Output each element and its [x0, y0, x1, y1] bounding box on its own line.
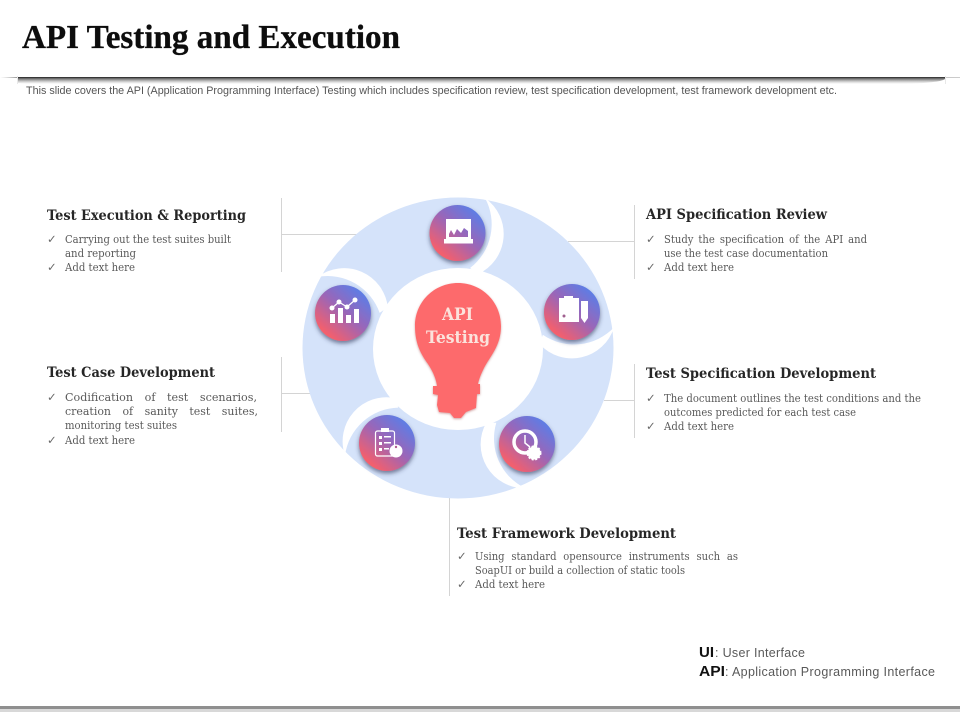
text block: Test Framework Development: Using standard opensource instruments such as	[475, 550, 738, 563]
text block: Test Case Development	[47, 365, 258, 447]
light bulb with label	[415, 283, 501, 418]
text block: Test Execution & Reporting: Add text here	[64, 261, 135, 274]
text block: Test Case Development: ✓	[47, 433, 57, 447]
icon: clock and gear	[499, 416, 555, 472]
text block: Test Execution & Reporting: Test Execution & Reporting	[47, 208, 247, 224]
text block: Test Case Development: creation of sanity test suites,	[65, 405, 258, 418]
text block: Test Case Development: Add text here	[64, 434, 135, 447]
text block: Test Execution & Reporting	[47, 208, 247, 274]
text block: Test Execution & Reporting: Carrying out the test suites built	[65, 233, 232, 246]
text block: Test Specification Development: Test Specification Development	[646, 366, 877, 382]
text block: Test Execution & Reporting: ✓	[47, 232, 57, 246]
title: API Testing and Execution	[22, 19, 400, 56]
text block: Test Case Development: monitoring test suites	[65, 419, 177, 432]
white swirl separators	[313, 198, 620, 499]
icon: bar chart with trend	[315, 285, 371, 341]
bulb	[415, 283, 501, 418]
text block: Test Specification Development	[646, 366, 921, 433]
text block: Test Case Development: Test Case Development	[47, 365, 216, 381]
light bulb with label: Testing	[426, 328, 490, 348]
text block: API Specification Review: ✓	[646, 260, 656, 274]
icon: checklist with timer	[359, 415, 415, 471]
text block: Test Execution & Reporting: and reporting	[65, 247, 136, 260]
text block: Test Case Development: Codification of test scenarios,	[65, 391, 257, 404]
glossary note	[699, 644, 935, 680]
text block: Test Specification Development: outcomes predicted for each test case	[664, 406, 856, 419]
ring background	[302, 198, 614, 498]
text block: Test Framework Development: Test Framework Development	[457, 526, 677, 542]
text block: Test Framework Development: Add text here	[474, 578, 545, 591]
ring diagram	[302, 198, 620, 499]
text block: API Specification Review: Add text here	[663, 261, 734, 274]
centre hole	[373, 268, 543, 430]
text block: API Specification Review	[645, 207, 867, 274]
text block: Test Specification Development: ✓	[646, 391, 656, 405]
leader lines	[281, 198, 634, 596]
text block: Test Framework Development: ✓	[457, 549, 467, 563]
text block: Test Case Development: ✓	[47, 390, 57, 404]
subtitle: This slide covers the API (Application Programming Interface) Testing which includes specification review, test specification development, test framework development etc.	[26, 85, 837, 97]
icon: clipboard and pencil	[544, 284, 600, 340]
bulb label: API	[441, 305, 473, 325]
text block: API Specification Review: Study the specification of the API and	[664, 233, 867, 246]
text block: API Specification Review: API Specification Review	[645, 207, 827, 223]
header rule	[0, 76, 960, 84]
text block: API Specification Review: use the test case documentation	[664, 247, 828, 260]
text block: Test Framework Development: SoapUI or build a collection of static tools	[475, 564, 685, 577]
text block: Test Framework Development: ✓	[457, 577, 467, 591]
text block: Test Execution & Reporting: ✓	[47, 260, 57, 274]
glossary note: : User Interface	[715, 646, 805, 660]
footer rule	[0, 706, 960, 712]
text block: Test Specification Development: Add text here	[663, 420, 734, 433]
glossary note: : Application Programming Interface	[725, 665, 935, 679]
text block: Test Specification Development: The document outlines the test conditions and the	[664, 392, 921, 405]
glossary note: API	[699, 663, 725, 680]
glossary note: UI	[699, 644, 714, 661]
text block: API Specification Review: ✓	[646, 232, 656, 246]
icon: laptop chart	[430, 205, 486, 261]
text block: Test Framework Development	[457, 526, 738, 591]
text block: Test Specification Development: ✓	[646, 419, 656, 433]
